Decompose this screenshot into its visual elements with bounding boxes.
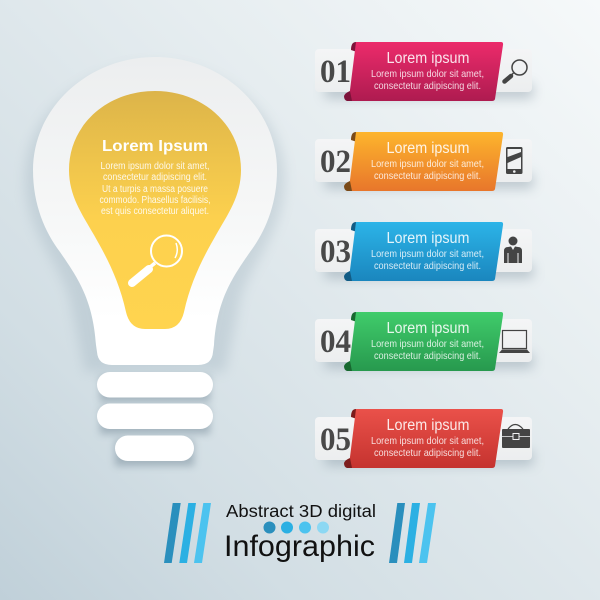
label 04: 04 [320,324,351,360]
label 02 [315,132,533,191]
light bulb [25,57,285,466]
icon: laptop [499,330,530,353]
dots [264,522,329,534]
label 01 [315,42,533,101]
bulb text: Lorem ipsum dolor sit amet, [100,161,210,172]
icon: businessman [504,236,522,263]
label 05: consectetur adipiscing elit. [374,447,481,459]
icon: phone [506,147,522,174]
bulb text: consectetur adipiscing elit. [103,172,207,183]
label 03: Lorem ipsum dolor sit amet, [371,248,484,260]
title: Infographic [224,530,375,563]
label 02: consectetur adipiscing elit. [374,170,481,182]
bulb text: Ut a turpis a massa posuere [102,184,208,195]
label 01: Lorem ipsum dolor sit amet, [371,68,484,80]
label 03: Lorem ipsum [386,230,470,247]
icon: briefcase [502,424,530,448]
bulb heading: Lorem Ipsum [102,138,208,155]
bulb text: est quis consectetur aliquet. [101,206,209,217]
bulb body [33,57,277,365]
label 03: consectetur adipiscing elit. [374,260,481,272]
label 02: Lorem ipsum [386,140,470,157]
subtitle: Abstract 3D digital [226,501,376,521]
label 04: consectetur adipiscing elit. [374,350,481,362]
left stripes [164,503,211,563]
icon: magnifier [132,236,182,283]
right stripes [389,503,436,563]
base ring 1 [97,372,213,402]
bulb text [100,161,210,217]
base ring 3 [115,436,194,466]
label 03 [315,222,533,281]
label 05: Lorem ipsum dolor sit amet, [371,435,484,447]
label 05 [315,409,533,468]
bulb window [69,91,241,329]
label 04: Lorem ipsum dolor sit amet, [371,338,484,350]
label 05: Lorem ipsum [386,417,470,434]
label 03: 03 [320,234,351,270]
label 04 [315,312,533,371]
label 02: 02 [320,144,351,180]
icon: magnifier [504,60,527,82]
bulb text: commodo. Phasellus facilisis, [100,195,210,206]
label 05: 05 [320,422,351,458]
base ring 2 [97,404,213,434]
label 04: Lorem ipsum [386,320,470,337]
label 01: consectetur adipiscing elit. [374,80,481,92]
label 02: Lorem ipsum dolor sit amet, [371,158,484,170]
label 01: Lorem ipsum [386,50,470,67]
label 01: 01 [320,54,351,90]
